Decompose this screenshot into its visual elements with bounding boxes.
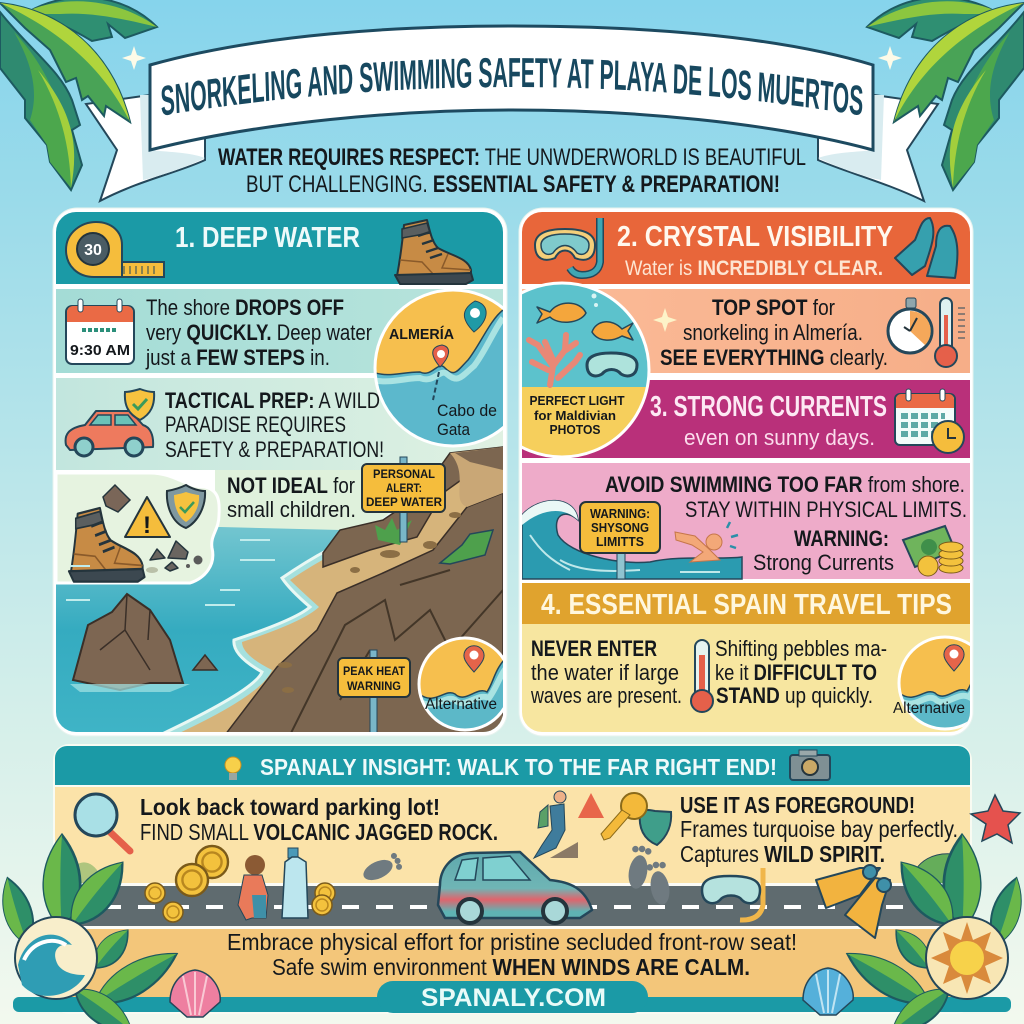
row: travel tips: STAND up quickly. [716, 683, 873, 708]
icon: tape measure: 30 [84, 242, 102, 259]
footer band [13, 997, 1011, 1012]
row: strong currents: 3. STRONG CURRENTS [650, 391, 887, 423]
row: top spot [522, 289, 970, 373]
text: foreground [680, 792, 958, 867]
sign: personal alert: DEEP WATER [366, 495, 442, 509]
icon: tired person [238, 855, 268, 920]
circle: snorkel scene: PHOTOS [550, 422, 601, 437]
row: tactical prep: PARADISE REQUIRES [165, 412, 346, 437]
row: travel tips: Shifting pebbles ma- [715, 636, 887, 661]
text: not ideal: NOT IDEAL for [227, 473, 355, 498]
row: top spot: SEE EVERYTHING clearly. [660, 345, 888, 370]
row: avoid swimming: WARNING: [794, 526, 889, 551]
header: insight [55, 746, 970, 785]
text: look back: Look back toward parking lot! [140, 794, 440, 820]
icon: thermometer [935, 298, 965, 367]
icon: hiker [534, 791, 578, 858]
title text: SNORKELING AND SWIMMING SAFETY AT PLAYA DE LOS MUERTOS [162, 58, 862, 116]
map: alternative small: Alternative [893, 700, 965, 717]
icon: sparkle [653, 308, 677, 332]
row: travel tips [522, 624, 970, 732]
sign: warning limits: SHYSONG [591, 521, 649, 535]
sign: peak heat warning: PEAK HEAT [343, 664, 406, 678]
text: embrace: Safe swim environment WHEN WINDS ARE CALM. [272, 954, 750, 980]
right plant cluster [840, 835, 1024, 1024]
text: look back [140, 794, 498, 845]
text: look back: FIND SMALL VOLCANIC JAGGED ROCK. [140, 819, 498, 845]
map: alternative small [893, 636, 970, 730]
row: travel tips: NEVER ENTER [531, 636, 657, 661]
subtitle [218, 144, 806, 198]
header: crystal visibility: 2. CRYSTAL VISIBILITY [617, 221, 893, 253]
icon: money and coins [903, 526, 963, 576]
left plant cluster [0, 835, 184, 1024]
icon: water bottle [282, 848, 308, 918]
icon: calendar 9:30 AM [66, 299, 134, 364]
header: deep water: 1. DEEP WATER [175, 222, 360, 254]
row: drops off: just a FEW STEPS in. [145, 345, 330, 370]
map labels and pins: ALMERÍA [389, 326, 454, 343]
row: travel tips: the water if large [531, 660, 679, 685]
circle: snorkel scene: for Maldivian [534, 408, 616, 423]
sand band lower [55, 925, 970, 1000]
icon: shield check [125, 389, 154, 420]
sign: personal alert [362, 457, 445, 542]
footer pill: spanaly.com [377, 981, 648, 1013]
row: strong currents: even on sunny days. [684, 425, 875, 450]
row: avoid swimming: AVOID SWIMMING TOO FAR from shore. [605, 472, 965, 497]
icon: magnifier [75, 794, 130, 851]
icon: key and shield [601, 793, 671, 845]
icon: blue shell [803, 968, 853, 1015]
icon: boot with rocks: ! [143, 512, 151, 539]
icon: wave medallion [15, 917, 97, 999]
map: alternative [418, 636, 503, 732]
sign: peak heat warning [338, 650, 410, 735]
sign: warning limits: WARNING: [590, 507, 650, 521]
icon: mask and snorkel [535, 218, 600, 275]
row: avoid swimming [522, 463, 970, 579]
header: spain travel tips: 4. ESSENTIAL SPAIN TRAVEL TIPS [541, 589, 952, 621]
sign: personal alert: PERSONAL [373, 467, 435, 481]
icon: red car [66, 411, 153, 456]
icon: palm leaves top left [0, 0, 157, 190]
row: drops off [56, 289, 503, 373]
icon: sparkle right [878, 46, 902, 70]
row: travel tips: waves are present. [530, 683, 682, 708]
map: Almería [376, 292, 503, 444]
subtitle: BUT CHALLENGING. ESSENTIAL SAFETY & PREPARATION! [246, 171, 780, 198]
icon: swimmer [675, 522, 738, 562]
map labels and pins [389, 301, 497, 439]
bushes [70, 854, 965, 885]
panel: deep water [53, 208, 531, 736]
sign: personal alert: ALERT: [386, 481, 422, 495]
panel: Spanaly insight [13, 744, 1011, 1014]
icon: teal car [438, 852, 592, 923]
row: drops off: very QUICKLY. Deep water [146, 320, 372, 345]
header: deep water [56, 212, 503, 284]
text: foreground: USE IT AS FOREGROUND! [680, 792, 915, 818]
text: not ideal [228, 477, 355, 517]
title banner ribbon [84, 24, 940, 203]
icon: thermometer small [691, 640, 713, 712]
rock in sea [66, 540, 275, 692]
icon: palm leaves top right [867, 0, 1024, 190]
header: crystal visibility [522, 212, 970, 284]
road [66, 883, 960, 929]
text: foreground: Captures WILD SPIRIT. [680, 841, 885, 867]
row: strong currents [522, 380, 970, 458]
footer pill: spanaly.com: SPANALY.COM [421, 984, 606, 1012]
icons: footprints [360, 844, 673, 906]
map: alternative: Alternative [425, 696, 497, 713]
row: travel tips: ke it DIFFICULT TO [715, 660, 877, 685]
header: spain travel tips [522, 583, 970, 624]
icon: warning triangle [578, 793, 604, 818]
icon: light bulb [225, 757, 241, 780]
wave foam and sand beach [160, 470, 503, 735]
icon: fish [537, 303, 633, 340]
panel: right safety column [518, 208, 974, 736]
icon: coins group [145, 846, 335, 922]
sign: warning limits [580, 502, 660, 579]
icon: road mask and snorkel [702, 868, 763, 920]
row: avoid swimming: Strong Currents [753, 550, 894, 575]
header: insight: SPANALY INSIGHT: WALK TO THE FAR RIGHT END! [260, 754, 777, 780]
text: not ideal: small children. [227, 497, 356, 522]
header: crystal visibility: Water is INCREDIBLY CLEAR. [625, 257, 883, 280]
row: tactical prep [56, 378, 503, 470]
circle: snorkel scene: PERFECT LIGHT [530, 393, 625, 408]
sea [56, 525, 503, 735]
row: tactical prep: SAFETY & PREPARATION! [165, 437, 384, 462]
map labels and pins: Cabo de [437, 401, 497, 420]
sign: warning limits: LIMITTS [596, 535, 644, 549]
icon: red starfish [971, 795, 1020, 843]
wave illustration [522, 501, 742, 579]
row: avoid swimming: STAY WITHIN PHYSICAL LIMITS. [685, 497, 967, 522]
icon: road fins [816, 865, 891, 938]
text: embrace: Embrace physical effort for pristine secluded front-row seat! [227, 929, 797, 955]
icon: hiking boot [395, 220, 473, 284]
icon: camera [790, 750, 830, 780]
circle: snorkel scene [470, 282, 660, 458]
icon: sun medallion [926, 917, 1008, 999]
map labels and pins: Gata [437, 420, 470, 439]
cream backdrop behind not ideal text [215, 470, 389, 530]
icon: calendar 9:30 AM: 9:30 AM [70, 342, 130, 359]
subtitle: WATER REQUIRES RESPECT: THE UNWDERWORLD IS BEAUTIFUL [218, 144, 806, 171]
icon: stopwatch [888, 298, 932, 353]
text: foreground: Frames turquoise bay perfectly. [680, 816, 958, 842]
sign: peak heat warning: WARNING [347, 679, 401, 693]
icon: pink shell [170, 970, 220, 1017]
icon: calendar and clock [895, 389, 964, 453]
icon: small mask [587, 353, 637, 376]
icon: tape measure [66, 222, 164, 277]
icon: coral [529, 335, 580, 385]
text: embrace [227, 929, 797, 980]
icon: sparkle left [122, 46, 146, 70]
sand band upper [55, 787, 970, 887]
row: tactical prep: TACTICAL PREP: A WILD [165, 388, 380, 413]
row: top spot: TOP SPOT for [712, 295, 835, 320]
row: top spot: snorkeling in Almería. [683, 320, 863, 345]
icon: boot with rocks [69, 485, 205, 582]
row: drops off: The shore DROPS OFF [146, 295, 344, 320]
cliff rocks [225, 447, 503, 735]
icon: fins [895, 218, 957, 278]
